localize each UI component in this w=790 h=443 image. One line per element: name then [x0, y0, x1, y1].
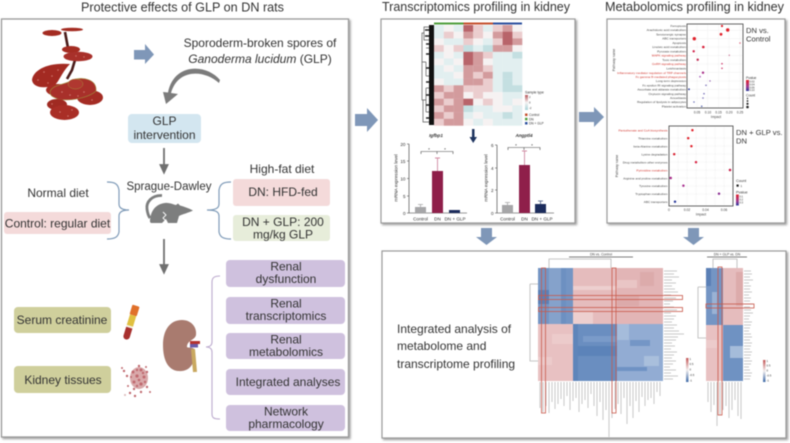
chart: DN vs. Control bubble plot: Ascorbate and aldarate metabolism — [637, 87, 686, 91]
panel: metabolomics profiling — [607, 19, 785, 223]
box: renal transcriptomics: transcriptomics — [246, 309, 326, 323]
arrow: curved gray arrow — [163, 69, 220, 104]
legend: sample type — [525, 90, 544, 126]
bar chart: Igfbp1: DN + GLP — [444, 216, 466, 222]
label: DN vs. Control: DN vs. — [746, 26, 769, 35]
arrow: mushroom to spores — [134, 44, 154, 64]
chart: DN + GLP vs. DN bubble plot: ABC transporters — [644, 200, 668, 204]
legend: DN vs. Control color scale: 1 — [690, 357, 692, 361]
chart: DN + GLP vs. DN bubble plot: Thiamine metabolism — [638, 136, 668, 140]
box: renal dysfunction — [226, 260, 345, 287]
arrow: intervention to rats — [160, 148, 168, 172]
chart: DN vs. Control bubble plot: Apoptosis — [672, 41, 686, 45]
bar chart: Angptl4: 0 — [491, 211, 494, 216]
chart: DN vs. Control bubble plot: Inflammatory mediator regulation of TRP channels — [617, 71, 686, 75]
heatmap: dendrogram — [422, 25, 434, 125]
chart: DN + GLP vs. DN bubble plot: Tyrosine metabolism — [639, 184, 668, 188]
chart: DN + GLP vs. DN bubble plot: Drug metabolism-other enzymes — [623, 160, 668, 164]
chart: DN + GLP vs. DN bubble plot: Tryptophan metabolism — [635, 192, 668, 196]
chart: DN vs. Control bubble plot: 0.20 — [726, 110, 733, 114]
bar chart: Igfbp1: * — [428, 147, 430, 152]
legend: sample type: -2 — [529, 106, 532, 110]
chart: DN vs. Control bubble plot: ABC transporters — [662, 37, 686, 41]
box: network pharmacology: pharmacology — [248, 417, 324, 431]
panel: protective effects of GLP — [2, 19, 348, 437]
legend: DN vs. Control color scale — [686, 357, 695, 382]
chart: DN + GLP vs. DN bubble plot — [615, 126, 733, 216]
chart: DN vs. Control bubble plot — [612, 24, 743, 119]
chart: DN + GLP vs. DN bubble plot: 0.06 — [721, 208, 727, 212]
bar chart: Igfbp1: 5 — [403, 194, 406, 199]
text: integrated analysis — [397, 322, 515, 371]
legend: DN vs. Control p-value and count — [746, 76, 756, 108]
chart: DN + GLP vs. DN bubble plot: Pyrimidine metabolism — [636, 168, 668, 172]
bracket: normal diet — [107, 182, 129, 239]
chart: DN vs. Control bubble plot: Leishmaniasis — [666, 66, 686, 70]
text: integrated analysis: transcriptome profiling — [397, 357, 515, 371]
chart: DN + GLP vs. DN bubble plot: Lysine degradation — [641, 152, 668, 156]
box: network pharmacology — [226, 404, 345, 431]
bar chart: Angptl4: 2 — [491, 188, 494, 193]
text: normal diet: Normal diet — [27, 186, 89, 200]
legend: DN vs. Control color scale: 0 — [690, 368, 692, 372]
bar chart: Igfbp1: * — [444, 147, 446, 152]
legend: sample type: DN + GLP — [529, 122, 544, 126]
bar chart: Angptl4: DN — [521, 216, 528, 222]
bar chart: Angptl4: mRNA expression level — [484, 154, 488, 202]
chart: DN + GLP vs. DN bubble plot: Arginine and proline metabolism — [623, 176, 668, 180]
bar chart: Igfbp1: 0 — [403, 211, 406, 216]
legend: DN vs. Control color scale: -1 — [690, 378, 692, 382]
chart: DN vs. Control bubble plot: Long-term depression — [656, 79, 686, 83]
bar chart: Angptl4: 4 — [491, 166, 494, 171]
chart: DN + GLP vs. DN bubble plot: 0.02 — [684, 208, 690, 212]
bar chart: Angptl4 — [484, 133, 554, 222]
legend: DN vs. Control p-value and count: Count — [746, 94, 755, 98]
chart: DN + GLP vs. DN bubble plot: 0 — [668, 208, 670, 212]
arrow: rats to samples — [160, 239, 168, 272]
chart: DN vs. Control bubble plot: Toxic metabolism — [662, 58, 686, 62]
heatmap: DN + GLP vs. DN correlations: DN + GLP vs. DN — [714, 252, 741, 256]
box: serum creatinine — [14, 307, 111, 333]
chart: DN + GLP vs. DN bubble plot: Pantothenate and CoA biosynthesis — [618, 128, 668, 132]
chart: DN vs. Control bubble plot: 0.10 — [705, 110, 711, 114]
chart: DN vs. Control bubble plot: Regulation of lipolysis in adipocytes — [637, 100, 686, 104]
legend: DN + GLP vs. DN count and p-value: Pvalue — [736, 190, 748, 194]
bar chart: Angptl4: * — [515, 143, 517, 148]
chart: DN vs. Control bubble plot: 0.25 — [737, 110, 743, 114]
legend: sample type: 2 — [529, 95, 531, 99]
title: transcriptomics: Transcriptomics profiling in kidney — [382, 0, 571, 14]
bar chart: Igfbp1: 10 — [400, 176, 406, 182]
bar chart: Angptl4: 6 — [491, 143, 494, 148]
bar chart: Igfbp1: DN — [434, 216, 441, 222]
legend: DN vs. Control p-value and count: 0.10 — [750, 88, 755, 92]
chart: DN vs. Control bubble plot: Amoebiasis — [670, 96, 686, 100]
legend: sample type: Sample type — [525, 90, 544, 94]
heatmap: DN vs. Control correlations — [530, 252, 684, 437]
bar chart: Igfbp1 — [394, 133, 467, 222]
legend: DN vs. Control p-value and count: 0.02 — [750, 80, 755, 84]
legend: sample type: DN — [529, 117, 534, 121]
box: DN + GLP: DN + GLP: 200 — [242, 215, 324, 229]
box: integrated analyses — [226, 369, 345, 395]
legend: DN vs. Control color scale: -0.5 — [690, 373, 695, 377]
box: integrated analyses: Integrated analyses — [236, 375, 340, 389]
chart: DN vs. Control bubble plot: 0.15 — [715, 110, 722, 114]
box: DN HFD-fed — [233, 179, 330, 206]
legend: DN + GLP vs. DN count and p-value: 0.1 — [740, 194, 744, 198]
box: renal transcriptomics: Renal — [270, 296, 302, 310]
legend: DN + GLP vs. DN color scale: -0.5 — [766, 374, 772, 378]
chart: DN vs. Control bubble plot: Ferroptosis — [671, 24, 686, 28]
label: DN + GLP vs. DN — [736, 128, 782, 146]
legend: DN + GLP vs. DN color scale: -1 — [766, 378, 769, 382]
box: GLP intervention — [128, 114, 201, 143]
bracket: analyses — [206, 276, 220, 419]
legend: sample type: 0 — [529, 100, 531, 104]
box: renal metabolomics: metabolomics — [249, 345, 323, 359]
legend: DN + GLP vs. DN color scale — [763, 359, 772, 382]
arrow: transcriptomics to metabolomics — [579, 107, 604, 127]
label: DN vs. Control: Control — [746, 34, 771, 44]
label: DN + GLP vs. DN: DN — [736, 136, 747, 146]
arrow: heatmap to bar charts — [470, 129, 477, 143]
box: DN + GLP — [233, 215, 330, 242]
chart: DN + GLP vs. DN bubble plot: Impact — [696, 212, 706, 216]
box: GLP intervention: intervention — [133, 128, 196, 142]
chart: DN vs. Control bubble plot: Fc epsilon RI signaling pathway — [642, 83, 686, 87]
text: spores of Ganoderma lucidum: Sporoderm-broken spores of — [184, 36, 337, 50]
box: DN + GLP: mg/kg GLP — [253, 228, 313, 242]
bar chart: Angptl4: DN + GLP — [531, 216, 553, 222]
chart: DN + GLP vs. DN bubble plot: beta-Alanine metabolism — [633, 144, 668, 148]
legend: DN + GLP vs. DN color scale: 0 — [766, 368, 768, 372]
bar chart: Igfbp1: 15 — [400, 159, 406, 164]
box: kidney tissues — [14, 366, 111, 393]
box: renal dysfunction: Renal — [270, 260, 302, 274]
panel: transcriptomics profiling — [381, 19, 575, 223]
legend: DN + GLP vs. DN color scale: 0.5 — [766, 364, 771, 368]
chart: DN vs. Control bubble plot: Arachidonic acid metabolism — [647, 28, 686, 32]
text: GLP species name: Ganoderma lucidum (GLP) — [188, 52, 332, 66]
legend: DN + GLP vs. DN count and p-value: 1 — [740, 184, 742, 188]
heatmap: DN vs. Control correlations: DN vs. Control — [590, 252, 612, 256]
bar chart: Angptl4: Angptl4 — [514, 133, 533, 138]
text: integrated analysis: metabolome and — [397, 339, 486, 353]
icon: blood tube — [122, 305, 140, 341]
box: DN HFD-fed: DN: HFD-fed — [248, 185, 318, 199]
title: metabolomics: Metabolomics profiling in kidney — [605, 0, 785, 14]
bracket: high-fat diet — [207, 182, 231, 239]
bar chart: Angptl4: * — [531, 143, 533, 148]
chart: DN vs. Control bubble plot: Impact — [711, 115, 721, 119]
heatmap: sample type bar — [434, 22, 522, 24]
arrow: transcriptomics to integrated analysis — [476, 228, 497, 245]
icon: Ganoderma lucidum mushroom — [32, 28, 103, 120]
box: GLP intervention: GLP — [152, 114, 177, 128]
legend: DN + GLP vs. DN count and p-value: 0.3 — [740, 200, 744, 204]
label: DN + GLP vs. DN: DN + GLP vs. — [736, 128, 782, 137]
box: serum creatinine: Serum creatinine — [17, 313, 108, 327]
chart: DN vs. Control bubble plot: MAPK signaling pathway — [652, 54, 686, 58]
legend: DN vs. Control p-value and count: Pvalue — [746, 76, 756, 80]
legend: DN + GLP vs. DN count and p-value: Count — [736, 179, 747, 183]
chart: DN vs. Control bubble plot: Fc gamma R-mediated phagocytosis — [636, 75, 686, 79]
icon: tissue fragments — [121, 365, 151, 397]
box: renal dysfunction: dysfunction — [256, 272, 316, 286]
legend: DN vs. Control p-value and count: 0.04 — [750, 82, 755, 86]
chart: DN vs. Control bubble plot: Serotonergic synapse — [656, 32, 686, 36]
chart: DN vs. Control bubble plot: 0.05 — [694, 110, 700, 114]
box: renal metabolomics: Renal — [270, 332, 302, 346]
chart: DN vs. Control bubble plot: Linoleic acid metabolism — [652, 45, 686, 49]
bar chart: Igfbp1: mRNA expression level — [394, 154, 398, 202]
bar chart: Igfbp1: Control — [413, 216, 428, 222]
chart: DN vs. Control bubble plot: Pathway name — [612, 49, 616, 71]
text: high-fat diet: High-fat diet — [250, 162, 315, 176]
legend: sample type: Control — [529, 113, 540, 117]
legend: DN vs. Control p-value and count: 0.06 — [750, 86, 755, 90]
box: kidney tissues: Kidney tissues — [24, 373, 102, 387]
bar chart: Angptl4: Control — [500, 216, 515, 222]
box: control regular diet — [4, 212, 111, 234]
box: renal metabolomics — [226, 332, 345, 359]
heatmap: DN + GLP vs. DN correlations — [698, 252, 754, 426]
box: network pharmacology: Network — [264, 404, 309, 418]
text: Sprague-Dawley: Sprague-Dawley — [126, 181, 212, 193]
chart: DN + GLP vs. DN bubble plot: Pathway name — [615, 155, 619, 177]
arrow: left panel to transcriptomics — [355, 108, 378, 132]
chart: DN vs. Control bubble plot: GnRH signaling pathway — [652, 62, 686, 66]
label: DN vs. Control — [746, 26, 771, 44]
legend: DN + GLP vs. DN color scale: 1 — [766, 359, 768, 363]
box: renal transcriptomics — [226, 296, 345, 324]
legend: DN + GLP vs. DN count and p-value: 0.2 — [740, 198, 744, 202]
legend: DN vs. Control color scale: 0.5 — [690, 362, 694, 366]
title: protective effects: Protective effects of GLP on DN rats — [81, 0, 284, 14]
legend: DN + GLP vs. DN count and p-value — [736, 179, 748, 206]
icon: rat — [147, 195, 193, 223]
chart: DN vs. Control bubble plot: Platelet activation — [662, 104, 686, 108]
bar chart: Igfbp1: 20 — [400, 142, 406, 147]
chart: DN vs. Control bubble plot: Pyruvate metabolism — [657, 49, 686, 53]
heatmap: transcriptomics — [434, 25, 522, 126]
chart: DN + GLP vs. DN bubble plot: 0.04 — [702, 208, 709, 212]
icon: kidney — [163, 320, 200, 372]
arrow: metabolomics to integrated analysis — [683, 228, 704, 245]
bar chart: Igfbp1: Igfbp1 — [429, 133, 443, 138]
box: control regular diet: Control: regular diet — [5, 216, 111, 230]
text: integrated analysis: Integrated analysis of — [397, 322, 512, 336]
chart: DN vs. Control bubble plot: Oxytocin signaling pathway — [648, 92, 686, 96]
panel: integrated analysis — [382, 251, 786, 438]
